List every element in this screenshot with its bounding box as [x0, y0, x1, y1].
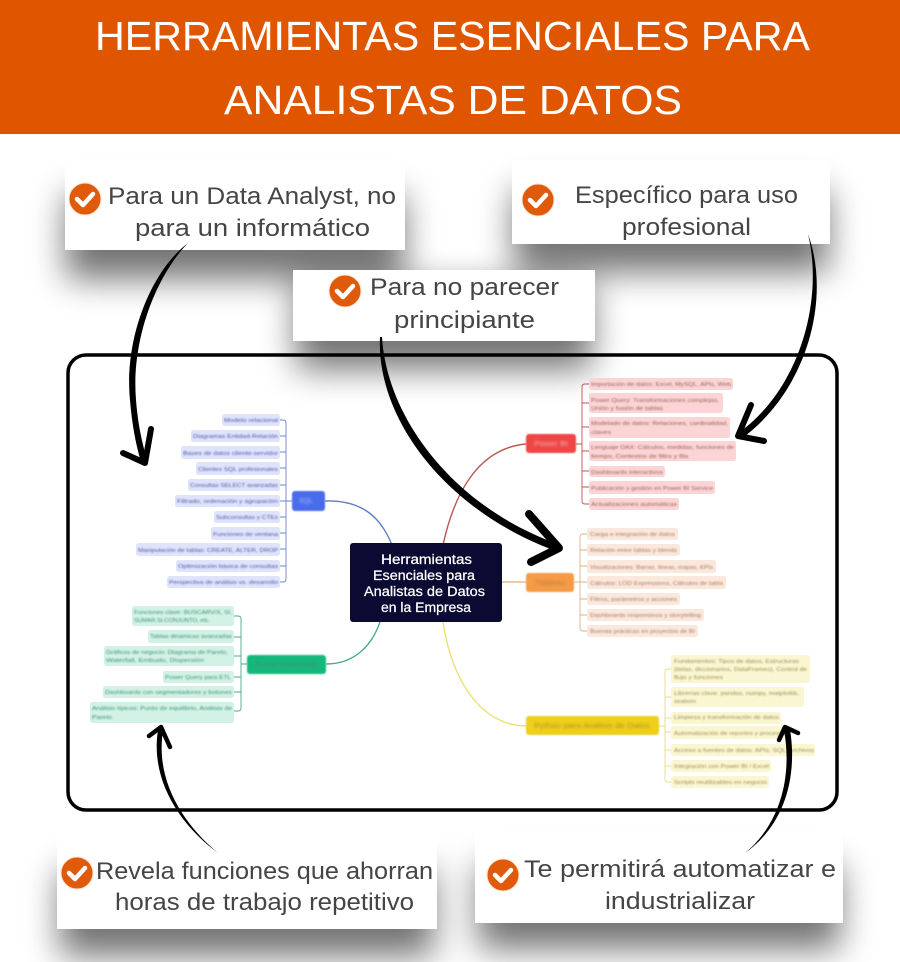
callout text: para un informático	[135, 215, 370, 242]
branch: Power BI: Dashboards interactivos	[591, 470, 663, 476]
branch: Excel Avanzado: Excel Avanzado	[255, 662, 318, 669]
callout: principiante	[293, 270, 595, 341]
callout text: Específico para uso	[575, 182, 798, 209]
branch: Python	[526, 655, 815, 788]
branch: Python: Fundamentos: Tipos de datos, Estructuras	[674, 659, 799, 665]
branch: Excel Avanzado: Gráficos de negocio: Diagrama de Pareto,	[106, 650, 229, 656]
branch: Tableau: Dashboards responsivos y storytelling	[590, 613, 701, 619]
branch: Python: Limpieza y transformación de datos	[674, 715, 779, 721]
branch: SQL: SQL	[299, 498, 313, 505]
arrow: automatizar to Python	[745, 727, 798, 853]
branch: Tableau	[526, 528, 726, 637]
branch: Power BI: Importación de datos: Excel, MySQL, APIs, Web	[591, 382, 731, 388]
title banner	[0, 0, 900, 134]
callout: funciones	[57, 830, 437, 929]
branch: Python: seaborn	[674, 699, 696, 705]
branch: SQL	[136, 414, 325, 588]
icon: check badge	[329, 275, 361, 307]
callout text: industrializar	[605, 888, 755, 915]
branch: Excel Avanzado: Dashboards con segmentadores y botones	[105, 690, 232, 696]
callout text: principiante	[394, 307, 535, 334]
title: ANALISTAS DE DATOS	[224, 77, 682, 123]
branch: Python: Scripts reutilizables en negocio	[674, 780, 767, 786]
branch: SQL: Filtrado, ordenación y agrupación	[177, 499, 278, 505]
branch: Power BI: Publicación y gestión en Power BI Service	[591, 486, 713, 492]
callout text	[96, 858, 433, 916]
title	[95, 13, 811, 123]
callout text	[108, 183, 396, 242]
callout shadows	[60, 190, 840, 956]
icon: check badge	[522, 184, 554, 216]
branch: Excel Avanzado: Power Query para ETL	[165, 675, 231, 681]
central node	[350, 543, 502, 622]
callout text	[370, 274, 559, 334]
branch: Power BI: Power Query: Transformaciones complejas,	[591, 398, 720, 404]
branch: Python: Python para Análisis de Datos	[534, 723, 651, 730]
branch: Tableau: Carga e integración de datos	[590, 532, 675, 538]
callout: uso profesional	[512, 160, 830, 244]
branch: SQL: Diagramas Entidad-Relación	[193, 434, 278, 440]
branch: Tableau: Visualizaciones: Barras, líneas, mapas, KPIs	[590, 565, 713, 571]
branch: Python: Automatización de reportes y procesos	[674, 731, 786, 737]
branch: Power BI: Actualizaciones automáticas	[591, 502, 677, 508]
branch: Tableau: Cálculos: LOD Expressions, Cálculos de tabla	[590, 581, 724, 587]
callout text: horas de trabajo repetitivo	[115, 889, 414, 916]
branch: SQL: Subconsultas y CTEs	[216, 515, 278, 521]
branch: Tableau: Relación entre tablas y blends	[590, 548, 677, 554]
icon: check badge	[487, 859, 519, 891]
callout text: Revela funciones que ahorran	[96, 858, 433, 885]
branch: Excel Avanzado	[90, 606, 326, 723]
branch: SQL: Clientes SQL profesionales	[198, 467, 278, 473]
branch: Excel Avanzado: Análisis típicos: Punto de equilibrio, Análisis de	[92, 706, 232, 712]
branch: Power BI: Power BI	[534, 441, 568, 448]
branch: SQL: Funciones de ventana	[213, 532, 279, 538]
icon: check badge	[61, 857, 93, 889]
branch: SQL: Bases de datos cliente-servidor	[183, 451, 278, 457]
mind map	[90, 378, 815, 788]
branch: Power BI: Modelado de datos: Relaciones, cardinalidad,	[591, 421, 729, 427]
branch: Power BI: claves	[591, 430, 611, 436]
branch: Python: Librerías clave: pandas, numpy, matplotlib,	[674, 691, 800, 697]
branch: Power BI: Unión y fusión de tablas	[591, 406, 663, 412]
callout: Data Analyst	[65, 160, 405, 250]
branch: SQL: Optimización básica de consultas	[178, 564, 278, 570]
callout text: Te permitirá automatizar e	[524, 856, 836, 883]
branch connectors	[325, 444, 526, 726]
callout text: profesional	[622, 214, 751, 241]
central node: Herramientas	[381, 552, 472, 567]
branch: Power BI	[526, 378, 736, 510]
branch: Excel Avanzado: Waterfall, Embudo, Dispersión	[106, 658, 204, 664]
branch: Excel Avanzado: SUMAR.SI.CONJUNTO, etc.	[134, 618, 210, 624]
callout text: Para no parecer	[370, 274, 559, 301]
branch: Tableau: Tableau	[535, 580, 565, 587]
arrow: funciones to Excel	[149, 727, 218, 853]
branch: Tableau: Filtros, parámetros y acciones	[590, 597, 677, 603]
arrow: Data Analyst to SQL	[123, 243, 188, 463]
branch: Excel Avanzado: Funciones clave: BUSCARV/X, SI,	[134, 610, 232, 616]
central node: en la Empresa	[381, 600, 472, 615]
branch: Python: Integración con Power BI / Excel	[674, 764, 769, 770]
icon: check badge	[69, 183, 101, 215]
branch: SQL: Consultas SELECT avanzadas	[190, 483, 278, 489]
branch: Excel Avanzado: Pareto	[92, 715, 112, 721]
callout: automatizar	[475, 830, 843, 923]
callout text	[575, 182, 798, 241]
branch: SQL: Manipulación de tablas: CREATE, ALTER, DROP	[138, 548, 278, 554]
callout text	[524, 856, 836, 915]
branch: Power BI: Lenguaje DAX: Cálculos, medidas, funciones de	[591, 445, 734, 451]
branch: Power BI: tiempo, Contextos de filtro y fila	[591, 454, 689, 460]
branch: SQL: Modelo relacional	[224, 418, 278, 424]
mind map frame	[68, 355, 837, 810]
arrow: principiante to Tableau	[380, 337, 559, 562]
callout text: Para un Data Analyst, no	[108, 183, 396, 210]
branch: Tableau: Buenas prácticas en proyectos de BI	[590, 629, 696, 635]
title: HERRAMIENTAS ESENCIALES PARA	[95, 13, 811, 59]
central node: Analistas de Datos	[364, 584, 485, 599]
arrow: profesional to Power BI	[737, 234, 817, 441]
branch: Python: (listas, diccionarios, DataFrames), Control de	[674, 667, 807, 673]
branch: SQL: Perspectiva de análisis vs. desarrollo	[169, 580, 278, 586]
branch: Python: flujo y funciones	[674, 675, 723, 681]
branch: Excel Avanzado: Tablas dinámicas avanzadas	[150, 634, 232, 640]
central node: Esenciales para	[373, 568, 476, 583]
branch: Python: Acceso a fuentes de datos: APIs, SQL, archivos	[674, 748, 814, 754]
